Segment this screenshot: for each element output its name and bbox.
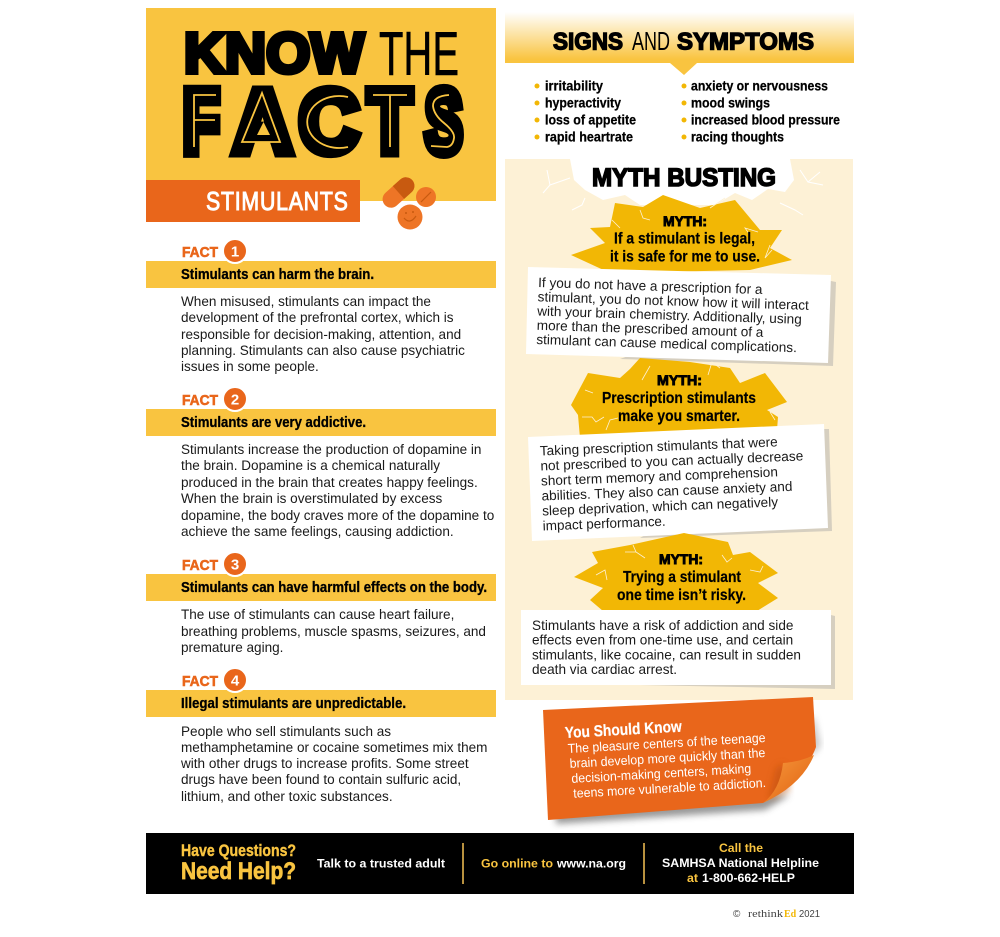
footer help bar: Go online to (481, 856, 553, 870)
fact 3 band: Stimulants can have harmful effects on the body. (181, 580, 487, 596)
fact 1 text: planning. Stimulants can also cause psychiatric (181, 343, 465, 358)
footer help bar: SAMHSA National Helpline (662, 856, 819, 870)
callout: you should know: You Should Know (564, 719, 683, 742)
title: facts: C (299, 72, 359, 172)
fact 2 text: Stimulants increase the production of dopamine in (181, 442, 481, 457)
symptoms list: irritability (545, 78, 603, 94)
myth 3 burst: Trying a stimulant (623, 569, 742, 586)
myth 2 burst (571, 358, 787, 438)
title: know the (184, 20, 459, 89)
fact 2 label (182, 387, 247, 411)
title: facts: A (233, 73, 292, 172)
fact 4 text: drugs have been found to contain sulfuric acid, (181, 772, 461, 787)
footer help bar: 1-800-662-HELP (702, 871, 795, 885)
fact 2 label: FACT (182, 392, 218, 409)
fact 4 text: with other drugs to increase profits. Some street (180, 756, 469, 771)
callout: you should know: teens more vulnerable to addiction. (573, 775, 766, 801)
myth 3 answer card: death via cardiac arrest. (532, 662, 677, 677)
myth 1 answer card: stimulant, you do not know how it will interact (537, 289, 809, 313)
footer help bar: at (687, 871, 698, 885)
title: facts: F (183, 72, 219, 172)
myth 1 answer card: stimulant can cause medical complications. (536, 332, 797, 355)
fact 4 label: 4 (231, 672, 240, 690)
symptoms list: anxiety or nervousness (691, 78, 828, 94)
icon: pills (379, 174, 436, 230)
fact 1 label: 1 (231, 244, 239, 260)
fact 1 (146, 239, 496, 374)
fact 2 text: dopamine, the body craves more of the dopamine to (181, 508, 494, 523)
myth busting heading: MYTH BUSTING (592, 164, 776, 192)
fact 1 text (181, 294, 465, 374)
fact 3 text: premature aging. (181, 640, 283, 655)
signs and symptoms banner: AND (632, 26, 670, 56)
fact 4 (146, 668, 496, 804)
fact 2 text: achieve the same feelings, causing addiction. (181, 524, 454, 539)
fact 3 label: FACT (182, 557, 218, 574)
header panel (146, 8, 496, 222)
signs and symptoms banner (505, 12, 854, 75)
title: facts: S (425, 72, 462, 171)
myth busting heading (543, 159, 823, 215)
footer help bar: Call the (719, 841, 763, 855)
fact 3 text (181, 607, 486, 655)
fact 2 label: 2 (231, 392, 239, 408)
symptoms list: mood swings (691, 96, 770, 110)
myth 1 answer card: with your brain chemistry. Additionally, using (536, 303, 802, 327)
myth 2 burst: Prescription stimulants (602, 390, 756, 407)
copyright: 2021 (799, 909, 820, 920)
fact 2 text: the brain. Dopamine is a chemical naturally (181, 458, 440, 473)
myth 2 burst: MYTH: (657, 372, 702, 388)
myth 1 burst: it is safe for me to use. (610, 248, 760, 266)
footer help bar: Talk to a trusted adult (317, 856, 445, 870)
panel: myth busting (505, 159, 853, 700)
myth 3 burst: MYTH: (659, 551, 703, 567)
copyright: rethink (748, 909, 783, 920)
copyright: © (733, 909, 741, 920)
fact 1 text: development of the prefrontal cortex, which is (181, 310, 454, 325)
callout: you should know (543, 697, 821, 824)
myth 1 burst: If a stimulant is legal, (614, 230, 755, 248)
symptoms list: hyperactivity (545, 96, 621, 110)
fact 1 band (146, 261, 496, 288)
footer help bar: Need Help? (181, 858, 296, 885)
myth 3 burst: one time isn’t risky. (617, 587, 746, 604)
fact 1 label (182, 239, 247, 263)
fact 4 label: FACT (182, 673, 218, 690)
fact 3 text: breathing problems, muscle spasms, seizures, and (181, 624, 486, 639)
signs and symptoms banner: SYMPTOMS (677, 28, 814, 56)
footer help bar (146, 833, 854, 894)
fact 3 label: 3 (231, 556, 239, 574)
fact 1 text: issues in some people. (181, 359, 319, 374)
myth 2 burst: make you smarter. (618, 408, 740, 425)
fact 4 label (182, 668, 247, 692)
fact 1 label: FACT (182, 244, 218, 261)
fact 2 band (146, 409, 496, 436)
myth 3 answer card: effects even from one-time use, and certain (532, 633, 793, 648)
myth 1 answer card: more than the prescribed amount of a (537, 318, 764, 340)
symptoms list: racing thoughts (691, 130, 784, 144)
myth 1 answer card: If you do not have a prescription for a (538, 275, 763, 297)
symptoms list (534, 78, 840, 144)
copyright: Ed (784, 909, 797, 920)
fact 2 text (181, 442, 494, 539)
fact 4 text: lithium, and other toxic substances. (181, 789, 393, 804)
myth 3 answer card (521, 610, 835, 689)
copyright (733, 909, 820, 920)
signs and symptoms banner: SIGNS (553, 28, 623, 56)
title: facts: T (368, 72, 411, 172)
fact 2 band: Stimulants are very addictive. (181, 415, 366, 431)
myth 1 burst (571, 195, 792, 273)
fact 3 text: The use of stimulants can cause heart failure, (181, 607, 454, 622)
fact 4 band: Illegal stimulants are unpredictable. (181, 696, 406, 712)
fact 1 band: Stimulants can harm the brain. (181, 267, 374, 283)
fact 4 text: People who sell stimulants such as (181, 724, 391, 739)
callout: you should know: brain develop more quickly than the (569, 745, 766, 771)
fact 4 text: methamphetamine or cocaine sometimes mix them (181, 740, 487, 755)
myth 1 answer card (526, 267, 836, 366)
title: facts (183, 72, 462, 172)
callout: you should know: The pleasure centers of the teenage (567, 730, 766, 756)
myth 2 answer card: short term memory and comprehension (541, 464, 778, 488)
symptoms list: loss of appetite (545, 112, 636, 128)
fact 2 text: produced in the brain that creates happy feelings. (181, 475, 478, 490)
myth 2 answer card: not prescribed to you can actually decrease (540, 448, 804, 473)
stimulants banner: STIMULANTS (206, 187, 348, 217)
myth 2 answer card: abilities. They also can cause anxiety and (541, 479, 793, 503)
callout: you should know: decision-making centers, making (571, 761, 752, 786)
fact 3 band (146, 574, 496, 601)
fact 3 label (182, 552, 247, 576)
fact 4 band (146, 690, 496, 717)
myth 3 burst (574, 533, 778, 611)
myth 2 answer card: Taking prescription stimulants that were (540, 434, 778, 458)
footer help bar: Have Questions? (181, 841, 296, 860)
fact 4 text (180, 724, 487, 804)
myth 1 burst: MYTH: (663, 213, 707, 229)
fact 2 (146, 387, 496, 539)
fact 2 text: When the brain is overstimulated by excess (181, 491, 443, 506)
fact 1 text: When misused, stimulants can impact the (181, 294, 431, 309)
symptoms list: increased blood pressure (691, 112, 840, 128)
myth 2 answer card: impact performance. (542, 514, 666, 533)
footer help bar: www.na.org (556, 856, 626, 870)
symptoms list: rapid heartrate (545, 130, 633, 144)
myth 3 answer card: Stimulants have a risk of addiction and side (532, 618, 793, 633)
title: know the: KNOW (184, 22, 364, 86)
fact 1 text: responsible for decision-making, attention, and (181, 327, 461, 342)
myth 2 answer card (528, 424, 832, 541)
fact 3 (146, 552, 496, 655)
myth 2 answer card: sleep deprivation, which can negatively (542, 494, 778, 518)
title: know the: THE (379, 20, 459, 89)
stimulants banner (146, 180, 360, 222)
myth 3 answer card: stimulants, like cocaine, can result in sudden (532, 647, 801, 662)
